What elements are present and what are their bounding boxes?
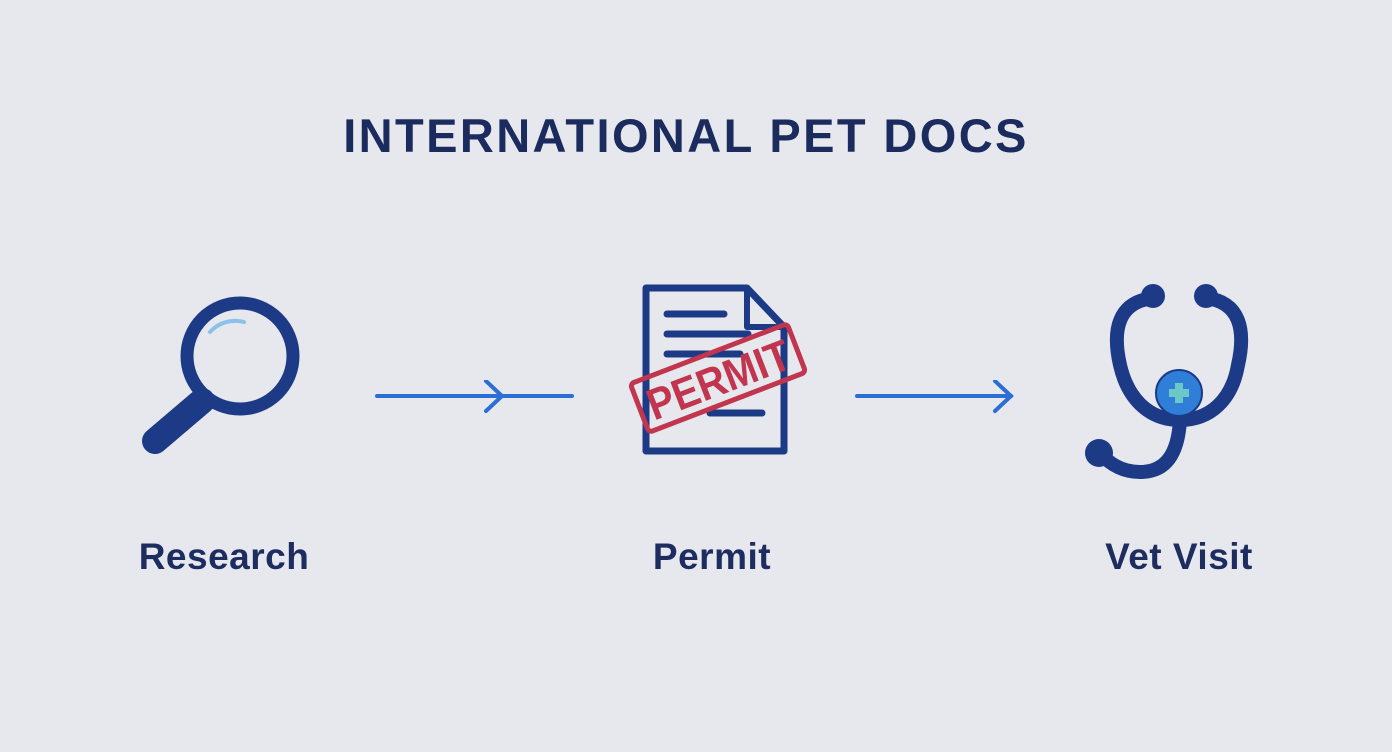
title: INTERNATIONAL PET DOCS [343,109,1029,162]
label: vet visit: Vet Visit [1105,536,1253,577]
icon: stethoscope [1085,284,1248,479]
arrow: research to permit [375,380,574,414]
icon: permit document [628,284,808,454]
label: research: Research [139,536,309,577]
arrow: permit to vet [855,380,1014,414]
icon: magnifier [142,296,300,454]
label: permit: Permit [653,536,771,577]
stamp: PERMIT [640,331,798,430]
